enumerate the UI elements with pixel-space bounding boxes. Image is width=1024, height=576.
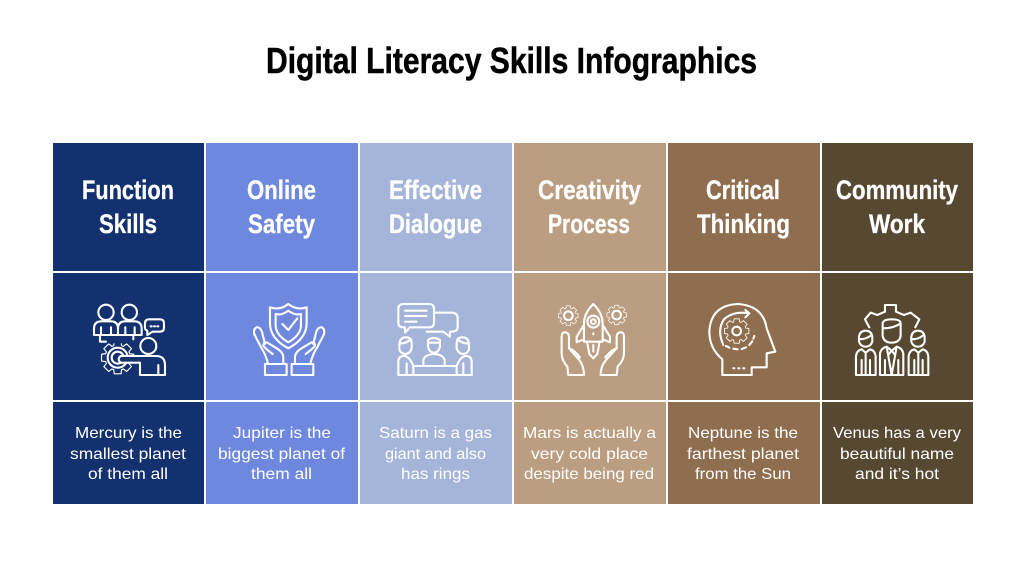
description: critical thinking: from the Sun	[695, 466, 791, 483]
description: critical thinking: farthest planet	[687, 446, 800, 463]
heading: creativity process: Creativity	[538, 175, 641, 205]
description: creativity process: despite being red	[524, 466, 654, 483]
icon: hands holding shield	[254, 304, 324, 375]
description: function skills: of them all	[88, 466, 168, 483]
description: online safety: Jupiter is the	[233, 425, 331, 442]
panel: critical thinking	[668, 143, 820, 504]
heading: creativity process	[538, 175, 641, 239]
description: effective dialogue: Saturn is a gas	[379, 425, 492, 442]
heading: function skills: Function	[82, 175, 174, 205]
description: online safety: them all	[251, 466, 312, 483]
heading: critical thinking: Thinking	[697, 209, 790, 239]
description: online safety: biggest planet of	[218, 446, 346, 463]
heading: online safety: Online	[247, 175, 316, 205]
icon: rocket with gears and hands	[559, 304, 626, 375]
description: effective dialogue	[379, 425, 492, 483]
heading: community work: Community	[836, 175, 958, 205]
description: critical thinking: Neptune is the	[688, 425, 798, 442]
description: critical thinking	[687, 425, 800, 483]
description: function skills: smallest planet	[70, 446, 187, 463]
icon: group conversation	[398, 304, 472, 375]
heading: effective dialogue: Dialogue	[389, 209, 482, 239]
icon: team under gear	[856, 305, 928, 375]
description: community work	[833, 425, 961, 483]
title: Digital Literacy Skills Infographics	[266, 40, 757, 81]
description: community work: Venus has a very	[833, 425, 961, 442]
heading: function skills	[82, 175, 174, 239]
description: function skills: Mercury is the	[75, 425, 182, 442]
heading: critical thinking: Critical	[706, 175, 780, 205]
description: creativity process: Mars is actually a	[523, 425, 656, 442]
description: effective dialogue: giant and also	[385, 446, 486, 463]
description: community work: and it’s hot	[855, 466, 940, 483]
description: effective dialogue: has rings	[401, 466, 470, 483]
panel: creativity process	[514, 143, 666, 504]
heading: online safety	[247, 175, 316, 239]
description: function skills	[70, 425, 187, 483]
description: creativity process: very cold place	[531, 446, 648, 463]
description: online safety	[218, 425, 346, 483]
heading: effective dialogue: Effective	[389, 175, 482, 205]
heading: critical thinking	[697, 175, 790, 239]
icon: head with gear	[709, 304, 775, 375]
heading: online safety: Safety	[248, 209, 315, 239]
heading: community work: Work	[869, 209, 926, 239]
heading: community work	[836, 175, 958, 239]
heading: effective dialogue	[389, 175, 482, 239]
description: creativity process	[523, 425, 656, 483]
panel: function skills	[53, 143, 204, 504]
panel: effective dialogue	[360, 143, 512, 504]
panel: online safety	[206, 143, 358, 504]
panel: community work	[822, 143, 973, 504]
heading: function skills: Skills	[99, 209, 157, 239]
icon: team with gear	[93, 305, 165, 375]
description: community work: beautiful name	[840, 446, 954, 463]
heading: creativity process: Process	[548, 209, 630, 239]
